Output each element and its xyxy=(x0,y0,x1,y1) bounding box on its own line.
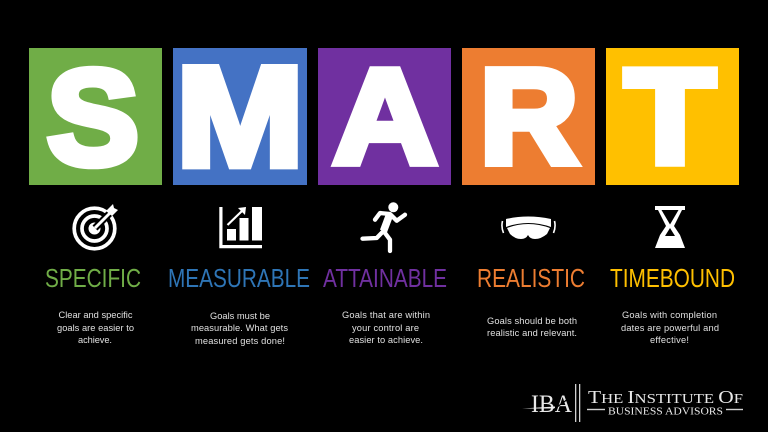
text: timebound description: Goals with completion xyxy=(622,310,717,320)
text: timebound description: dates are powerful and xyxy=(621,323,719,333)
panel: S tile xyxy=(29,42,162,193)
panel: M tile: M xyxy=(176,38,304,196)
heading: ATTAINABLE: ATTAINABLE xyxy=(323,263,447,293)
text: measurable description: measured gets done! xyxy=(195,336,285,346)
icon: goggles xyxy=(502,216,555,239)
icon: running person xyxy=(362,202,405,251)
panel: T tile xyxy=(606,42,739,192)
text: specific description: goals are easier to xyxy=(57,323,134,333)
text: specific description: achieve. xyxy=(78,335,112,345)
text: timebound description: effective! xyxy=(650,335,689,345)
logo: The Institute of Business Advisors: BUSINESS ADVISORS xyxy=(608,406,723,418)
icon: bar chart with arrow xyxy=(219,207,262,248)
text: realistic description: Goals should be both xyxy=(487,316,577,326)
heading: REALISTIC: REALISTIC xyxy=(477,263,585,293)
text: timebound description xyxy=(621,310,719,345)
text: specific description xyxy=(57,310,134,345)
panel: S tile: S xyxy=(47,42,139,193)
text: measurable description xyxy=(191,311,288,346)
heading: TIMEBOUND: TIMEBOUND xyxy=(610,263,735,293)
heading: MEASURABLE: MEASURABLE xyxy=(168,263,310,293)
text: attainable description: your control are xyxy=(352,323,419,333)
logo: The Institute of Business Advisors: IBA xyxy=(531,391,572,418)
text: attainable description: Goals that are within xyxy=(342,310,430,320)
text: attainable description xyxy=(342,310,430,345)
panel: R tile: R xyxy=(480,41,578,192)
text: measurable description: measurable. What gets xyxy=(191,323,288,333)
icon: hourglass xyxy=(655,206,685,248)
panel: T tile: T xyxy=(625,42,715,192)
panel: A tile: A xyxy=(333,40,437,192)
icon: target with arrow xyxy=(74,204,118,249)
text: measurable description: Goals must be xyxy=(210,311,270,321)
text: realistic description: realistic and relevant. xyxy=(487,328,577,338)
text: attainable description: easier to achieve. xyxy=(349,335,423,345)
heading: SPECIFIC: SPECIFIC xyxy=(45,263,141,293)
logo: The Institute of Business Advisors xyxy=(522,384,743,422)
logo: The Institute of Business Advisors: THE INSTITUTE OF xyxy=(588,387,743,407)
text: specific description: Clear and specific xyxy=(58,310,133,320)
text: realistic description xyxy=(487,316,577,338)
